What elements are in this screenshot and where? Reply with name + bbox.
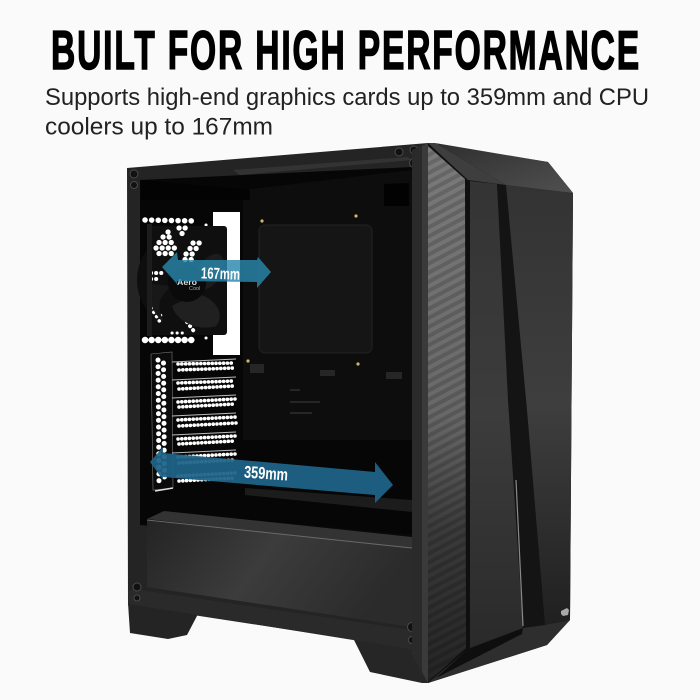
top ridge: [428, 143, 506, 185]
highlight line: [516, 480, 523, 626]
screws: [130, 146, 418, 644]
expansion slots: [172, 359, 236, 481]
PC case: [127, 143, 428, 683]
subtitle: Supports high-end graphics cards up to 359mm and CPU: [45, 84, 649, 111]
arrow: 167mm: [162, 252, 271, 288]
front logo: [561, 608, 569, 616]
subtitle: coolers up to 167mm: [45, 114, 273, 140]
bottom frame: [128, 590, 422, 651]
top face: [435, 143, 573, 193]
feet: [128, 603, 428, 683]
front pillar: [412, 143, 428, 683]
fan logo: [177, 278, 200, 292]
rear side vent: [151, 352, 173, 491]
fan logo: Cool: [189, 286, 200, 292]
exhaust fan: [147, 224, 227, 336]
dark centre strip: [497, 184, 545, 628]
arrow label 167mm: 167mm: [201, 265, 240, 284]
arrow: 359mm: [150, 447, 393, 503]
white window: [213, 212, 240, 355]
tray details: [146, 214, 412, 548]
front left panel: [470, 181, 523, 648]
fan vent holes: [145, 220, 206, 340]
front panel: [428, 143, 573, 683]
subtitle: [45, 84, 649, 140]
fan ring: [137, 230, 237, 330]
arrow label 359mm: 359mm: [243, 462, 289, 485]
PSU shroud: [147, 511, 412, 627]
front base silhouette: [428, 143, 573, 683]
carbon fibre strip: [428, 146, 466, 682]
motherboard cutout: [259, 225, 372, 353]
bottom chamfer: [428, 620, 570, 683]
side frame: [127, 143, 428, 683]
fan logo: Aero: [177, 278, 197, 287]
interior: [140, 157, 412, 550]
front right panel: [506, 185, 573, 625]
